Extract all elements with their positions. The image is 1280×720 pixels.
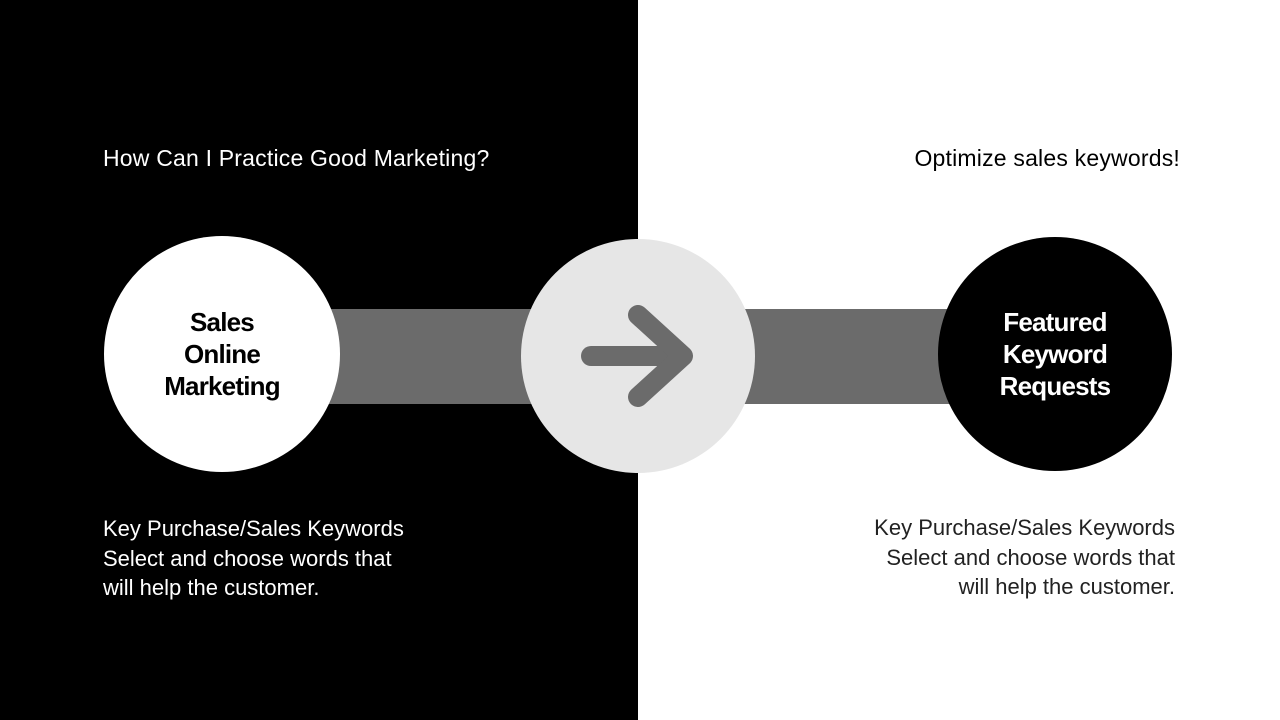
circle: Featured Keyword Requests — [938, 237, 1172, 471]
circle: Sales Online Marketing: Sales — [190, 307, 254, 337]
left body text: Key Purchase/Sales Keywords — [103, 516, 404, 541]
right body text: Key Purchase/Sales Keywords — [874, 515, 1175, 540]
circle: arrow center — [521, 239, 755, 473]
circle: Featured Keyword Requests: Featured — [1003, 307, 1107, 337]
connector bar left — [320, 309, 540, 404]
left body text — [103, 516, 404, 600]
left body text: Select and choose words that — [103, 546, 392, 570]
left heading: How Can I Practice Good Marketing? — [103, 145, 489, 171]
circle: Featured Keyword Requests: Keyword — [1003, 339, 1107, 369]
right body text: will help the customer. — [959, 574, 1175, 599]
right body text — [874, 515, 1175, 599]
left black panel — [0, 0, 638, 720]
circle: Sales Online Marketing — [104, 236, 340, 472]
circle: Featured Keyword Requests: Requests — [1000, 371, 1110, 401]
circle: Sales Online Marketing: Marketing — [164, 371, 280, 401]
right heading: Optimize sales keywords! — [914, 145, 1180, 171]
circle: Sales Online Marketing: Online — [184, 339, 260, 369]
connector bar right — [740, 309, 960, 404]
right body text: Select and choose words that — [886, 544, 1175, 570]
icon: arrow — [581, 305, 693, 407]
left body text: will help the customer. — [103, 575, 319, 600]
